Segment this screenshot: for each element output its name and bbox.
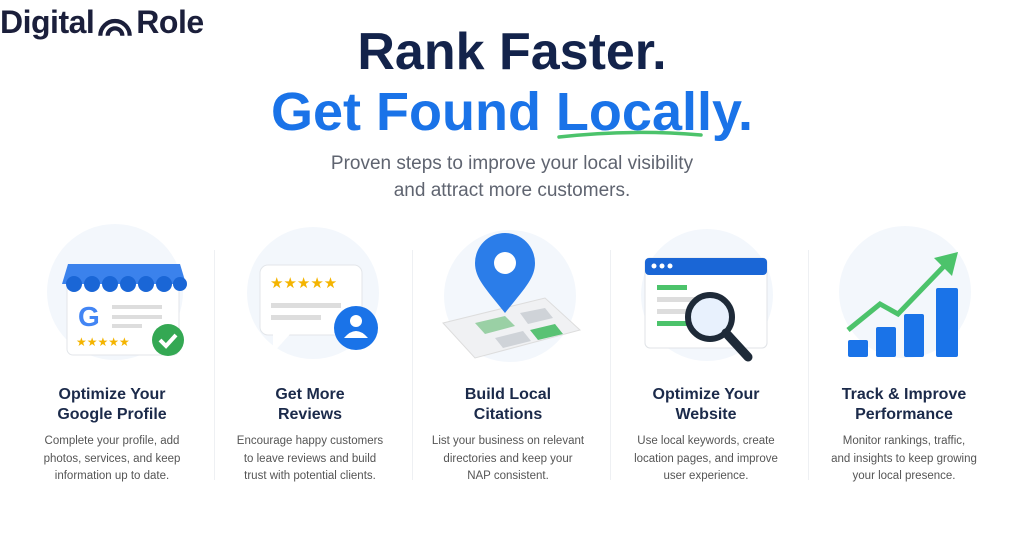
step 5: and insights to keep growing — [831, 452, 977, 464]
icon: growth chart — [839, 226, 971, 358]
title: Get Found Locally. — [271, 82, 753, 142]
step 3: List your business on relevant — [432, 435, 584, 447]
step 2 — [237, 386, 383, 482]
step 5: Monitor rankings, traffic, — [843, 435, 965, 447]
step 1: photos, services, and keep — [44, 452, 180, 464]
step 4: Optimize Your — [652, 386, 759, 403]
step 1: Google Profile — [57, 406, 167, 423]
step 2: Encourage happy customers — [237, 435, 383, 447]
step 1 — [44, 386, 180, 482]
icon: storefront — [47, 224, 187, 360]
step 3: Citations — [474, 406, 542, 423]
step 2: to leave reviews and build — [244, 452, 376, 464]
step 1: information up to date. — [55, 470, 169, 482]
step 2: Get More — [275, 386, 345, 403]
step 1: Complete your profile, add — [45, 435, 179, 447]
step 5: Track & Improve — [842, 386, 966, 403]
icon: storefront: ★★★★★ — [76, 335, 130, 349]
icon: storefront: G — [78, 301, 100, 332]
step 2: Reviews — [278, 406, 342, 423]
step 3: NAP consistent. — [467, 470, 549, 482]
icon: review bubble — [247, 227, 379, 359]
step 5: your local presence. — [853, 470, 955, 482]
title: Rank Faster. — [357, 23, 667, 81]
step 3 — [432, 386, 584, 482]
step 4: Website — [675, 406, 737, 423]
subtitle: Proven steps to improve your local visibility — [331, 153, 693, 174]
logo: Digital Role — [0, 4, 204, 40]
subtitle: and attract more customers. — [394, 180, 630, 201]
title — [271, 23, 753, 142]
step 2: trust with potential clients. — [244, 470, 376, 482]
icon: map pin — [442, 230, 581, 362]
underline — [557, 130, 703, 139]
step 3: directories and keep your — [443, 452, 573, 464]
step 5: Performance — [855, 406, 953, 423]
step 4: user experience. — [663, 470, 749, 482]
step 4: location pages, and improve — [634, 452, 778, 464]
icon: website magnifier — [641, 229, 773, 362]
icon: review bubble: ★★★★★ — [270, 275, 337, 292]
step 1: Optimize Your — [58, 386, 165, 403]
step 3: Build Local — [465, 386, 551, 403]
subtitle — [331, 153, 693, 201]
step 5 — [831, 386, 977, 482]
step 4 — [634, 386, 778, 482]
step 4: Use local keywords, create — [637, 435, 775, 447]
